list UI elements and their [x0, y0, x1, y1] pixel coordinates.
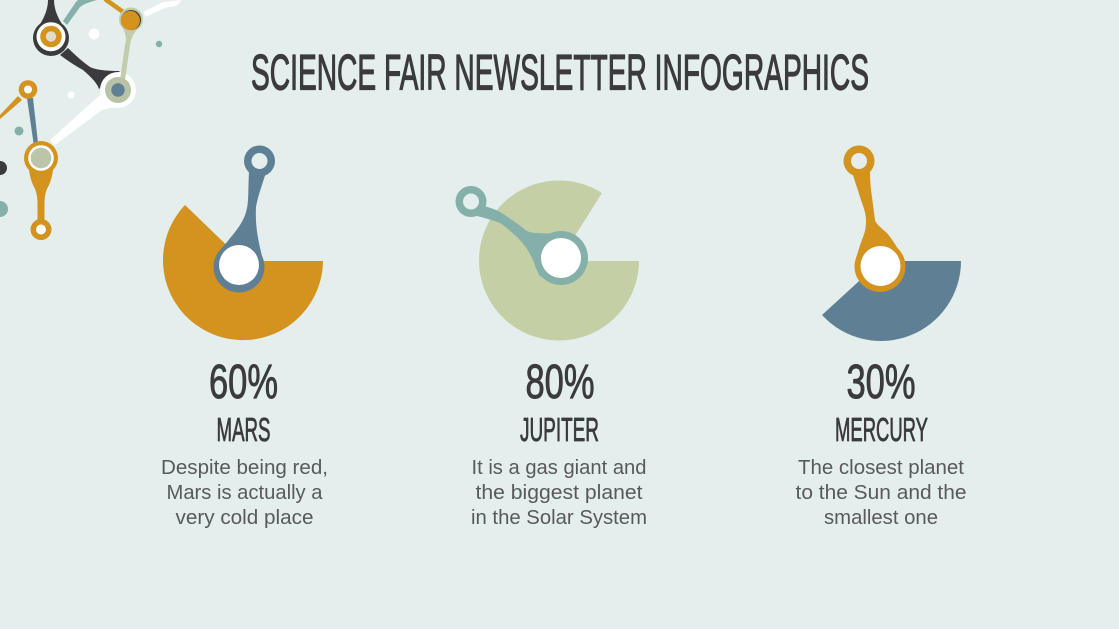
- panel: Jupiter: [456, 180, 647, 529]
- label: Mars: MARS: [216, 411, 270, 448]
- description: Mars: very cold place: [176, 507, 314, 529]
- description: Mars: Despite being red,: [161, 457, 328, 479]
- description: Jupiter: the biggest planet: [476, 482, 643, 504]
- panel: Mercury: [796, 146, 966, 529]
- icon: Mars pointer: [214, 146, 275, 292]
- panel: Mars: [161, 146, 328, 529]
- description: Mercury: to the Sun and the: [796, 482, 966, 504]
- label: Jupiter: JUPITER: [520, 411, 599, 448]
- icon: Jupiter pointer: [456, 186, 588, 285]
- value: 30%: 30%: [846, 356, 916, 409]
- label: Mercury: MERCURY: [835, 411, 928, 448]
- pie chart: Mars 60%: [163, 205, 323, 340]
- description: Jupiter: It is a gas giant and: [472, 457, 646, 479]
- description: Mars: [161, 457, 328, 529]
- description: Mercury: smallest one: [824, 507, 938, 529]
- decoration: molecule cluster: [0, 0, 181, 240]
- description: Jupiter: [471, 457, 647, 529]
- pie chart: Jupiter 80%: [479, 180, 639, 340]
- pie chart: Mercury 30%: [822, 261, 961, 341]
- value: 80%: 80%: [526, 356, 594, 409]
- icon: Mercury pointer: [844, 146, 906, 292]
- description: Jupiter: in the Solar System: [471, 507, 647, 529]
- value: 60%: 60%: [209, 356, 278, 409]
- decoration: lower links: [0, 80, 58, 240]
- description: Mars: Mars is actually a: [166, 482, 323, 504]
- description: Mercury: The closest planet: [798, 457, 964, 479]
- description: Mercury: [796, 457, 966, 529]
